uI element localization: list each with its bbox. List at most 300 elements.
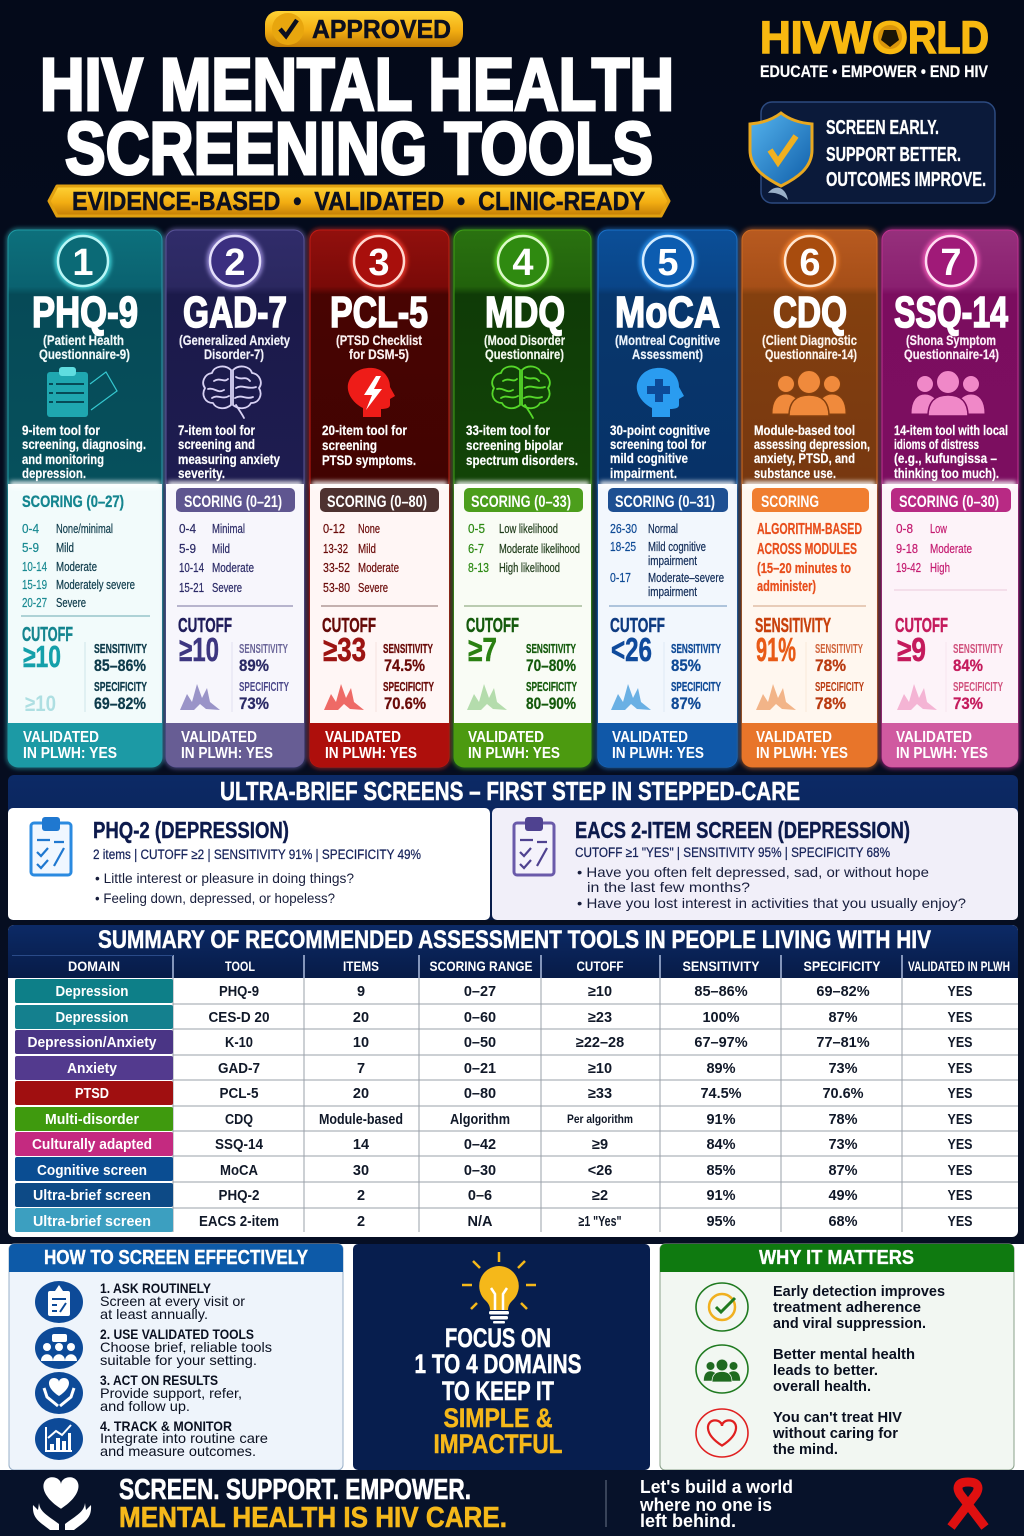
sensitivity and specificity: SENSITIVITY <box>383 642 433 656</box>
scoring panel: (15–20 minutes to <box>757 560 851 577</box>
validated footer <box>166 723 304 767</box>
row: CDQ: Per algorithm <box>567 1112 633 1126</box>
number badge: 6 <box>799 242 821 284</box>
card 3: PCL-5 <box>310 230 449 767</box>
row: GAD-7: YES <box>948 1061 973 1077</box>
row: PHQ-2: 0–6 <box>468 1188 492 1204</box>
scoring panel: SCORING (0–33) <box>471 492 571 511</box>
row: CES-D 20: 20 <box>353 1010 369 1026</box>
icon: brain <box>492 366 550 418</box>
scoring panel: SCORING (0–80) <box>327 492 427 511</box>
full name <box>904 332 999 362</box>
description <box>894 422 1008 481</box>
row: CES-D 20: 87% <box>828 1010 858 1026</box>
row: CDQ: CDQ <box>225 1112 253 1128</box>
row: EACS 2-item: ≥1 "Yes" <box>578 1214 622 1230</box>
number badge: 7 <box>940 242 962 284</box>
row: PHQ-9: PHQ-9 <box>219 984 259 1000</box>
icon: people <box>911 370 985 416</box>
sensitivity and specificity: 80–90% <box>526 694 576 713</box>
row: PHQ-9: 85–86% <box>694 984 748 1000</box>
validated footer: VALIDATED <box>325 729 401 746</box>
scoring panel: 0-4 <box>22 521 39 536</box>
full name: Assessment) <box>632 346 703 362</box>
closing message: where no one is <box>639 1495 772 1515</box>
tool name: PCL-5 <box>330 288 428 337</box>
row: EACS 2-item: YES <box>948 1214 973 1230</box>
table header row: SENSITIVITY <box>682 958 760 974</box>
description: assessing depression, <box>754 436 870 452</box>
row: EACS 2-item: 68% <box>828 1214 858 1230</box>
table header row: SPECIFICITY <box>804 958 881 974</box>
full name <box>39 332 130 362</box>
tool name: PHQ-9 <box>32 288 138 337</box>
full name: (Mood Disorder <box>484 332 565 348</box>
description <box>322 422 416 468</box>
panel: focus callout: IMPACTFUL <box>434 1429 562 1459</box>
cutoff: CUTOFF <box>610 615 665 637</box>
scoring panel: High likelihood <box>499 560 560 575</box>
validated footer: IN PLWH: YES <box>325 745 417 762</box>
scoring panel: Moderately severe <box>56 577 135 592</box>
box: EACS 2-item: EACS 2-ITEM SCREEN (DEPRESSION) <box>575 817 910 843</box>
row: SSQ-14: YES <box>948 1137 973 1153</box>
description: screening <box>322 437 377 453</box>
full name: (Shona Symptom <box>906 332 996 348</box>
reason 2 <box>696 1345 915 1395</box>
icon: clipboard <box>31 817 71 875</box>
scoring panel: 18-25 <box>610 539 636 554</box>
row: MoCA: <26 <box>588 1163 612 1179</box>
cutoff <box>610 615 665 710</box>
title <box>40 43 674 190</box>
sensitivity and specificity: 85–86% <box>94 656 146 675</box>
row: K-10: 0–50 <box>464 1035 496 1051</box>
scoring panel: 0-5 <box>468 521 485 536</box>
scoring panel: 8-13 <box>468 560 489 575</box>
row: MoCA: Cognitive screen <box>37 1163 147 1179</box>
number badge: 5 <box>657 242 679 284</box>
sensitivity and specificity <box>953 642 1003 713</box>
panel: how to screen effectively: HOW TO SCREEN EFFECTIVELY <box>44 1247 309 1269</box>
description: screening tool for <box>610 436 706 452</box>
table header row: ITEMS <box>343 958 379 974</box>
sensitivity and specificity: 70–80% <box>526 656 576 675</box>
description: screening, diagnosing. <box>22 436 146 452</box>
reason 2: leads to better. <box>773 1362 878 1379</box>
callout: screen early <box>750 102 995 203</box>
cutoff: ≥9 <box>897 631 926 668</box>
validated footer: VALIDATED <box>756 729 832 746</box>
row: MoCA <box>15 1157 973 1181</box>
full name <box>336 332 422 362</box>
title: HIV MENTAL HEALTH <box>40 43 674 126</box>
cutoff: CUTOFF <box>178 615 232 637</box>
icon: hands holding heart <box>33 1477 91 1530</box>
scoring panel: 10-14 <box>179 560 204 575</box>
row: PHQ-2: 2 <box>357 1188 365 1204</box>
number badge <box>57 235 109 287</box>
number badge <box>209 235 261 287</box>
sensitivity and specificity: SPECIFICITY <box>671 680 721 694</box>
row: GAD-7: ≥10 <box>588 1061 612 1077</box>
scoring panel: impairment <box>648 584 697 599</box>
row: MoCA: 30 <box>353 1163 369 1179</box>
sensitivity and specificity: 78% <box>815 656 846 675</box>
row: GAD-7: 7 <box>357 1061 365 1077</box>
scoring panel: Moderate likelihood <box>499 541 580 556</box>
row: PHQ-9: Depression <box>56 984 128 1000</box>
cutoff: CUTOFF <box>22 624 73 646</box>
scoring panel: 33-52 <box>323 560 350 575</box>
row: K-10 <box>15 1030 973 1054</box>
row: GAD-7: 0–21 <box>464 1061 496 1077</box>
full name: (Generalized Anxiety <box>179 332 290 348</box>
number badge <box>784 235 836 287</box>
scoring panel: Minimal <box>212 521 245 536</box>
scoring panel: 5-9 <box>179 541 196 556</box>
validated footer: IN PLWH: YES <box>468 745 560 762</box>
number badge <box>497 235 549 287</box>
row: PHQ-2 <box>15 1183 973 1207</box>
validated footer: IN PLWH: YES <box>23 745 117 762</box>
closing message: left behind. <box>640 1511 736 1531</box>
panel: why it matters <box>660 1244 1014 1470</box>
row: PHQ-9: 0–27 <box>464 984 496 1000</box>
cutoff: CUTOFF <box>895 615 948 637</box>
scoring panel <box>166 481 304 723</box>
validated footer <box>8 723 162 767</box>
description: impairment. <box>610 465 677 481</box>
description: 33-item tool for <box>466 422 550 438</box>
box: PHQ-2: • Feeling down, depressed, or hopeless? <box>95 890 335 906</box>
sensitivity and specificity <box>526 642 577 713</box>
row: CES-D 20: ≥23 <box>588 1010 612 1026</box>
scoring panel <box>454 481 591 723</box>
panel: focus callout: TO KEEP IT <box>442 1376 554 1406</box>
step 4: 4. TRACK & MONITOR <box>100 1418 232 1434</box>
scoring panel: Severe <box>358 580 388 595</box>
reason 3: You can't treat HIV <box>773 1409 902 1426</box>
row: EACS 2-item <box>15 1208 973 1232</box>
icon: red ribbon <box>951 1482 985 1527</box>
title: SCREENING TOOLS <box>65 107 653 190</box>
row: SSQ-14 <box>15 1132 973 1156</box>
validated footer <box>882 723 1018 767</box>
tool name: MoCA <box>615 288 720 337</box>
scoring panel: Moderate <box>930 541 972 556</box>
scoring panel: Low <box>930 521 947 536</box>
scoring panel: High <box>930 560 950 575</box>
row: CES-D 20: CES-D 20 <box>208 1010 270 1026</box>
row: PHQ-2: ≥2 <box>592 1188 608 1204</box>
row: K-10: 77–81% <box>816 1035 870 1051</box>
sensitivity and specificity: SENSITIVITY <box>526 642 576 656</box>
row: PHQ-2: Ultra-brief screen <box>33 1188 151 1204</box>
scoring panel: impairment <box>648 553 697 568</box>
step 1 <box>35 1280 245 1323</box>
cutoff <box>895 615 948 710</box>
description: severity. <box>178 465 225 481</box>
sensitivity and specificity <box>94 642 147 713</box>
row: PCL-5: 0–80 <box>464 1086 496 1102</box>
icon: head with lightning <box>348 368 395 417</box>
full name <box>762 332 857 362</box>
row: MoCA: MoCA <box>220 1163 258 1179</box>
row: SSQ-14: ≥9 <box>592 1137 608 1153</box>
scoring panel: None/minimal <box>56 521 113 536</box>
description: 30-point cognitive <box>610 422 710 438</box>
validated footer: VALIDATED <box>612 729 688 746</box>
cutoff: ≥33 <box>323 631 366 668</box>
subtitle ribbon: EVIDENCE-BASED • VALIDATED • CLINIC-READY <box>72 186 645 216</box>
step 2: 2. USE VALIDATED TOOLS <box>100 1326 254 1342</box>
reason 1 <box>696 1283 945 1332</box>
box: EACS 2-item: CUTOFF ≥1 "YES" | SENSITIVITY 95% | SPECIFICITY 68% <box>575 845 890 860</box>
scoring panel: None <box>358 521 380 536</box>
scoring panel: 20-27 <box>22 595 47 610</box>
scoring panel: Normal <box>648 521 678 536</box>
description: 7-item tool for <box>178 422 255 438</box>
full name: Disorder-7) <box>204 346 264 362</box>
row: PHQ-2: 49% <box>828 1188 858 1204</box>
logo: HIVWORLD: O <box>872 12 908 63</box>
description: and monitoring <box>22 451 104 467</box>
approved badge <box>265 11 463 47</box>
icon: head with puzzle <box>637 368 684 417</box>
row: PHQ-2: 91% <box>706 1188 736 1204</box>
sensitivity and specificity: 78% <box>815 694 846 713</box>
reason 1: and viral suppression. <box>773 1315 926 1332</box>
number badge <box>353 235 405 287</box>
panel: summary table <box>8 925 1018 1237</box>
step 2 <box>35 1326 272 1369</box>
number badge: 2 <box>224 242 246 284</box>
table header row <box>12 955 1010 978</box>
full name: for DSM-5) <box>349 346 409 362</box>
row: CES-D 20: Depression <box>56 1010 128 1026</box>
validated footer: VALIDATED <box>23 729 99 746</box>
full name: (Montreal Cognitive <box>615 332 720 348</box>
validated footer <box>742 723 877 767</box>
slogan: SCREEN. SUPPORT. EMPOWER. <box>119 1474 471 1506</box>
scoring panel: Low likelihood <box>499 521 558 536</box>
row: K-10: Depression/Anxiety <box>28 1035 156 1051</box>
scoring panel: Mild <box>212 541 230 556</box>
card 5: MoCA <box>598 230 737 767</box>
cutoff: ≥10 <box>179 631 219 668</box>
description: mild cognitive <box>610 450 688 466</box>
validated footer: VALIDATED <box>181 729 257 746</box>
scoring panel: administer) <box>757 578 816 595</box>
description <box>610 422 710 481</box>
row: PCL-5: PTSD <box>75 1086 109 1102</box>
logo tagline: EDUCATE • EMPOWER • END HIV <box>760 62 989 81</box>
row: PCL-5: YES <box>948 1086 973 1102</box>
scoring panel: Severe <box>56 595 86 610</box>
row: CDQ: Algorithm <box>450 1112 510 1128</box>
heading: ULTRA-BRIEF SCREENS – FIRST STEP IN STEPPED-CARE <box>220 776 800 806</box>
row: PHQ-2: YES <box>948 1188 973 1204</box>
sensitivity and specificity: SPECIFICITY <box>815 680 864 694</box>
number badge: 3 <box>368 242 390 284</box>
scoring panel: Mild <box>358 541 376 556</box>
row: PCL-5: 20 <box>353 1086 369 1102</box>
sensitivity headline <box>755 615 831 710</box>
row: SSQ-14: 84% <box>706 1137 736 1153</box>
reason 1: Early detection improves <box>773 1283 945 1300</box>
row: SSQ-14: Culturally adapted <box>32 1137 152 1153</box>
approved badge: APPROVED <box>312 14 451 44</box>
cutoff <box>22 624 73 716</box>
row: CDQ: 78% <box>828 1112 858 1128</box>
row: GAD-7: 89% <box>706 1061 736 1077</box>
scoring panel <box>310 481 449 723</box>
row: GAD-7: GAD-7 <box>218 1061 260 1077</box>
row: MoCA: 87% <box>828 1163 858 1179</box>
step 1: 1. ASK ROUTINELY <box>100 1280 212 1296</box>
logo: HIVWORLD: HIVW <box>760 12 871 63</box>
cutoff <box>466 615 519 710</box>
full name <box>615 332 720 362</box>
box: EACS 2-item: • Have you lost interest in activities that you usually enjoy? <box>577 895 966 911</box>
row: EACS 2-item: Ultra-brief screen <box>33 1214 151 1230</box>
row: PCL-5: PCL-5 <box>220 1086 258 1102</box>
description: spectrum disorders. <box>466 452 578 468</box>
validated footer: IN PLWH: YES <box>612 745 704 762</box>
row: K-10: YES <box>948 1035 973 1051</box>
row: CES-D 20: 100% <box>702 1010 740 1026</box>
box: EACS 2-item <box>492 808 1018 920</box>
panel: ultra-brief screens <box>8 775 1018 920</box>
description: screening bipolar <box>466 437 563 453</box>
row: K-10: 10 <box>353 1035 369 1051</box>
icon: brain <box>203 366 261 418</box>
description <box>466 422 578 468</box>
scoring panel: Mild cognitive <box>648 539 706 554</box>
scoring panel: 13-32 <box>323 541 348 556</box>
sensitivity headline: 91% <box>756 631 796 668</box>
scoring panel: SCORING (0–27) <box>22 492 124 511</box>
step 1: Screen at every visit or <box>100 1293 245 1309</box>
validated footer <box>310 723 449 767</box>
tool name: CDQ <box>773 288 847 337</box>
box: PHQ-2: • Little interest or pleasure in doing things? <box>95 870 354 886</box>
scoring panel: 26-30 <box>610 521 637 536</box>
card 1: PHQ-9 <box>8 230 162 767</box>
sensitivity and specificity: 73% <box>239 694 269 713</box>
row: PHQ-9: ≥10 <box>588 984 612 1000</box>
description: measuring anxiety <box>178 451 280 467</box>
row: MoCA: 85% <box>706 1163 736 1179</box>
row: EACS 2-item: 95% <box>706 1214 736 1230</box>
callout: screen early: SUPPORT BETTER. <box>826 144 961 166</box>
sensitivity and specificity: SENSITIVITY <box>671 642 721 656</box>
row: CDQ: Module-based <box>319 1112 403 1128</box>
step 4 <box>35 1418 268 1460</box>
row: PHQ-2: PHQ-2 <box>218 1188 260 1204</box>
row: SSQ-14: 73% <box>828 1137 858 1153</box>
row: PCL-5 <box>15 1081 973 1105</box>
sensitivity and specificity: SPECIFICITY <box>94 680 147 694</box>
row: SSQ-14: 14 <box>353 1137 369 1153</box>
full name <box>179 332 290 362</box>
row: K-10: K-10 <box>225 1035 253 1051</box>
full name: (Patient Health <box>43 332 124 348</box>
reason 3 <box>696 1409 902 1458</box>
row: EACS 2-item: EACS 2-item <box>199 1214 279 1230</box>
row: PCL-5: 74.5% <box>700 1086 742 1102</box>
scoring panel: 53-80 <box>323 580 350 595</box>
number badge <box>925 235 977 287</box>
validated footer: VALIDATED <box>468 729 544 746</box>
sensitivity and specificity: 87% <box>671 694 701 713</box>
scoring panel: 6-7 <box>468 541 484 556</box>
scoring panel: ACROSS MODULES <box>757 541 857 558</box>
row: PCL-5: 70.6% <box>822 1086 864 1102</box>
panel: focus callout <box>353 1244 650 1470</box>
icon: clipboard <box>514 817 554 875</box>
validated footer <box>454 723 591 767</box>
slogan <box>119 1474 507 1534</box>
row: EACS 2-item: 2 <box>357 1214 365 1230</box>
step 3: Provide support, refer, <box>100 1385 242 1401</box>
step 3: and follow up. <box>100 1398 190 1414</box>
footer band <box>0 1470 1024 1536</box>
panel: why it matters: WHY IT MATTERS <box>759 1247 914 1269</box>
box: PHQ-2: 2 items | CUTOFF ≥2 | SENSITIVITY 91% | SPECIFICITY 49% <box>93 847 421 862</box>
sensitivity and specificity <box>383 642 434 713</box>
row: MoCA: YES <box>948 1163 973 1179</box>
row: CDQ: Multi-disorder <box>45 1112 139 1128</box>
icon: people <box>772 370 846 416</box>
sensitivity and specificity: 84% <box>953 656 983 675</box>
closing message: Let's build a world <box>640 1477 793 1497</box>
description: depression. <box>22 465 86 481</box>
sensitivity and specificity: SPECIFICITY <box>526 680 577 694</box>
row: EACS 2-item: N/A <box>468 1214 493 1230</box>
panel: how to screen effectively <box>9 1244 343 1470</box>
scoring panel: Moderate–severe <box>648 570 724 585</box>
card 4: MDQ <box>454 230 591 767</box>
scoring panel: Severe <box>212 580 242 595</box>
scoring panel: Mild <box>56 540 74 555</box>
validated footer: IN PLWH: YES <box>756 745 848 762</box>
sensitivity and specificity: 85% <box>671 656 701 675</box>
number badge: 4 <box>512 242 534 284</box>
cutoff <box>178 615 232 710</box>
scoring panel: 0-17 <box>610 570 631 585</box>
scoring panel <box>8 481 162 723</box>
row: SSQ-14: SSQ-14 <box>215 1137 263 1153</box>
description: (e.g., kufungissa – <box>894 450 997 466</box>
cutoff: ≥10 <box>25 691 56 716</box>
panel: focus callout: 1 TO 4 DOMAINS <box>414 1349 582 1379</box>
step 4: and measure outcomes. <box>100 1443 256 1459</box>
box: PHQ-2: PHQ-2 (DEPRESSION) <box>93 817 289 843</box>
scoring panel: Moderate <box>56 559 97 574</box>
validated footer: VALIDATED <box>896 729 972 746</box>
full name <box>484 332 565 362</box>
row: K-10: 67–97% <box>694 1035 748 1051</box>
description: substance use. <box>754 465 836 481</box>
row: GAD-7 <box>15 1056 973 1080</box>
table header row: SCORING RANGE <box>430 958 532 974</box>
sensitivity and specificity: 74.5% <box>384 656 425 675</box>
table header row: TOOL <box>225 958 255 974</box>
step 3: 3. ACT ON RESULTS <box>100 1372 218 1388</box>
sensitivity and specificity <box>239 642 289 713</box>
